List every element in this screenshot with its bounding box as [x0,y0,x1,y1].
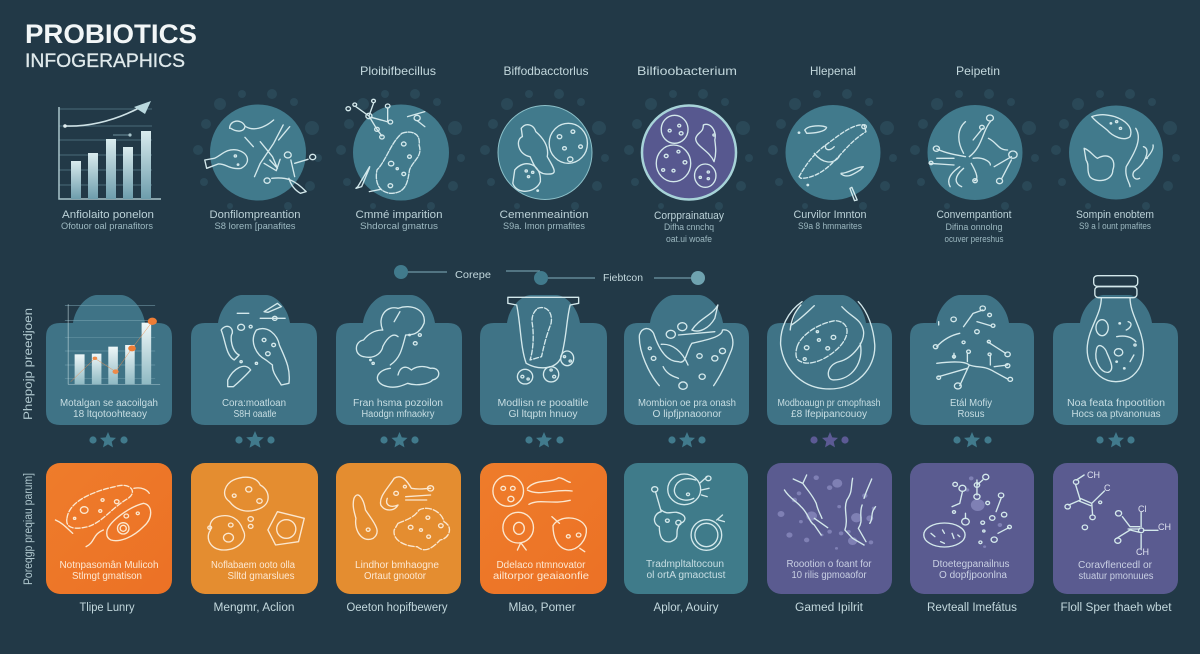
panel: row 2 card 4 [480,295,607,425]
caption: Cemenmeaintion [500,209,588,221]
panel: row 2 card 8 [1053,276,1178,425]
card text [932,559,1010,581]
icon: chemical structures: CH [1087,470,1100,480]
icon: rod bacterium and molecules [346,99,425,193]
card text: Etál Mofiy [950,398,992,409]
icon: chemical structures [1065,470,1171,557]
card text: Rosus [958,409,984,420]
panel: row 3 card 5 [624,463,748,614]
caption: Corpprainatuay [654,210,724,222]
chart: growth bars with arrow [59,101,161,199]
panel: circle 6 [910,89,1039,244]
card text: 18 ltqotoohteaoy [73,409,147,420]
panel: row 3 card 2 [191,463,318,614]
caption [500,209,588,231]
icon: bacteria [221,303,289,387]
card text: Lindhor bmhaogne [355,560,439,571]
card label: Mlao, Pomer [508,602,576,614]
icon: chemical structures: CH [1158,522,1171,532]
icon: colony cells [208,477,304,550]
title: PROBIOTICS [25,19,197,49]
card text [60,398,158,420]
card text: O dopfjpoonlna [939,570,1007,581]
chart caption: Ofotuor oal pranafitors [61,221,153,231]
card text: O lipfjpnaoonor [652,409,722,420]
card text: S8H oaatle [234,409,277,420]
icon: chemical structures: C [1104,483,1111,493]
icon: cloud colonies [356,307,439,387]
icon: assorted bacteria [353,477,449,550]
card text [211,560,295,582]
caption [654,210,724,244]
title [25,19,197,72]
panel: circle 1 [193,89,322,231]
caption [1076,209,1154,231]
side label: row 3: Poreqgp preqiau parum] [23,473,35,585]
card text: Dtoetegpanailnus [932,559,1010,570]
icon: bacteria strands [205,120,316,193]
card text: ol ortA gmaoctust [646,570,726,581]
column headings: Bilfioobacterium [637,64,737,78]
card text: Slltd gmarslues [228,571,294,582]
card text [498,398,589,420]
column headings: Peipetin [956,64,1000,78]
panel: row 2 card 5 [624,295,749,425]
caption [794,209,866,231]
icon: scattered particles and strands [778,475,876,550]
card text [786,559,872,581]
card text [646,559,726,581]
chart caption: Anfiolaito ponelon [62,209,154,221]
card label: Gamed Ipilrit [795,602,864,614]
panel: circle 7 [1051,89,1180,231]
card text: Notnpasomân Mulicoh [60,560,158,571]
card text [60,560,158,582]
caption: Sompin enobtem [1076,209,1154,221]
card text: Ddelaco ntmnovator [496,560,586,571]
icon: funnel with bacterium [508,297,579,384]
icon: dotted bacterium [798,125,866,201]
panel: row 3 card 6 [767,463,892,614]
legend slider: Corepe [455,269,491,281]
caption: oat.ui woafe [666,234,712,244]
card text: Ortaut gnootor [364,571,427,582]
column headings: Biffodbacctorlus [504,64,588,78]
caption [356,209,442,231]
card text: Haodgn mfnaokry [362,409,434,420]
panel: row 2 card 1 [46,295,172,425]
card text: £8 lfepipancouoy [791,409,867,420]
icon: radial filaments [929,115,1017,187]
card label: Mengmr, Aclion [214,602,294,614]
card text: Coravflencedl or [1078,560,1153,571]
caption: S9a 8 hmmarites [798,221,862,231]
card label: Floll Sper thaeh wbet [1060,602,1172,614]
icon: branching network [933,306,1013,389]
panel: row 3 card 1 [46,463,172,614]
caption: Donfilompreantion [210,209,300,221]
caption [210,209,300,231]
panel: row 2 card 3 [336,295,462,425]
card text: Roootion o foant for [786,559,872,570]
panel: row 2 card 7 [910,295,1034,425]
panel: circle 3 [480,89,609,231]
column headings: Hlepenal [810,64,856,78]
card text [1067,398,1165,420]
card text: stuatur pmonuues [1078,571,1154,582]
card text [493,560,589,582]
legend slider [394,265,705,285]
panel: circle 5 [768,89,897,231]
card text: Modlisn re pooaltile [498,398,589,409]
icon: cells with flagella [652,474,724,550]
bar and line chart [65,304,160,384]
panel: row 3 card 4 [480,463,607,614]
panel: circle 2 [336,89,465,231]
card text: Noflabaem ooto olla [211,560,295,571]
caption [936,209,1012,244]
card text: Mombion oe pra onash [638,398,736,409]
card text [950,398,992,420]
card label: Aplor, Aouiry [654,602,719,614]
card label: Revteall Imefátus [927,602,1017,614]
panel: row 3 card 8 [1053,463,1178,614]
caption: Difha cnnchq [664,222,714,232]
caption: Convempantiont [936,209,1012,221]
column headings [360,64,1000,78]
panel: circle 4 (purple) [624,89,753,244]
card text [353,398,443,420]
caption: S9 a l ount pmafites [1079,221,1151,231]
caption: Curvilor Imnton [794,209,866,221]
caption: Shdorcal gmatrus [360,221,439,231]
icon: round cells and waves [493,476,586,552]
panel: row 2 card 6 [767,295,892,425]
card text: Fran hsma pozoilon [353,398,443,409]
side label: row 2: Phepojp preedjoen [23,308,35,420]
rating markers [89,431,1135,448]
card text [222,398,286,420]
card text: Gl ltqptn hnuoy [508,409,578,420]
title: INFOGERAPHICS [25,51,185,72]
icon: chemical structures: Cl [1138,504,1146,514]
card text [1078,560,1154,582]
card text: ailtorpor geaiaonfie [493,571,589,582]
caption: S8 lorem [panafites [214,221,296,231]
icon: molecules and oval cell [924,474,1011,548]
card text: Tradmpltaltocoun [646,559,724,570]
icon: cells [656,115,716,187]
card text: Noa feata fnpootition [1067,398,1165,409]
icon: round flask with bacterium [781,302,875,389]
caption: Difina onnolng [946,222,1002,232]
legend slider: Fiebtcon [603,272,643,284]
card text: 10 rilis gpmoaofor [792,570,867,581]
icon: gut villi [639,305,733,389]
icon: round cells [513,123,587,191]
card label: Tlipe Lunry [80,602,135,614]
card text: Modboaugn pr cmopfnash [778,398,880,409]
caption: Cmmé imparition [356,209,442,221]
card text [778,398,880,420]
card text: Motalgan se aacoilgah [60,398,158,409]
icon: probiotic bottle [1087,276,1143,382]
card label: Oeeton hopifbewery [346,602,448,614]
caption: ocuver pereshus [944,234,1004,244]
icon: bacteria cluster [1084,115,1153,187]
chart caption [61,209,154,231]
icon: chemical structures: CH [1136,547,1149,557]
card text: Cora:moatloan [222,398,286,409]
icon: rod bacteria [55,485,151,547]
panel: row 2 card 2 [191,295,317,425]
panel: row 3 card 3 [336,463,461,614]
caption: S9a. Imon prmafites [503,221,585,231]
card text: Stlmgt gmatison [72,571,142,582]
panel: row 3 card 7 [910,463,1034,614]
card text [638,398,736,420]
card text [355,560,439,582]
column headings: Ploibifbecillus [360,64,436,78]
card text: Hocs oa ptvanonuas [1072,409,1160,420]
